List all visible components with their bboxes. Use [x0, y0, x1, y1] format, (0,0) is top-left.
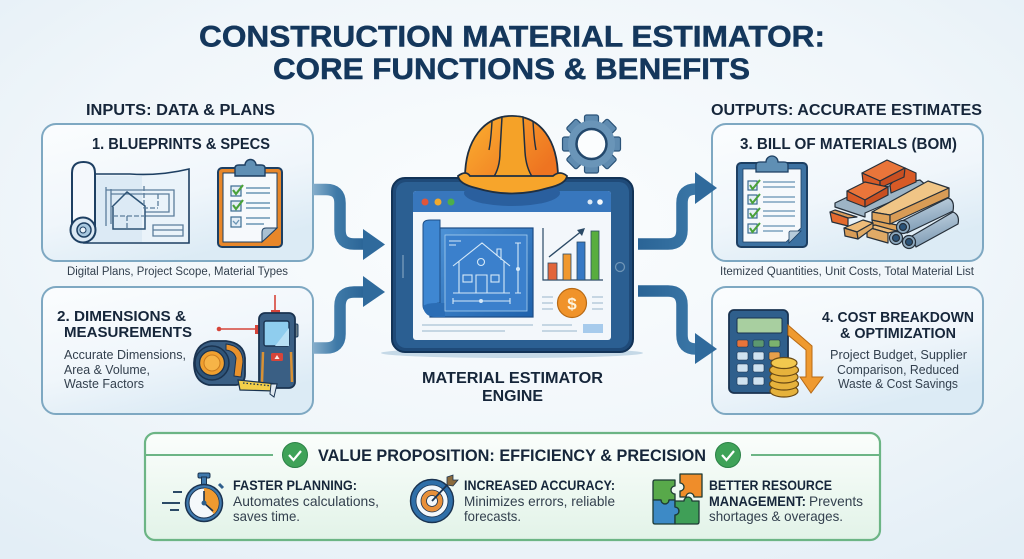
panel heading: dimensions: MEASUREMENTS: [64, 324, 192, 341]
title: CONSTRUCTION MATERIAL ESTIMATOR:: [199, 20, 825, 54]
center: material estimator engine: [381, 115, 643, 405]
heading: inputs: INPUTS: DATA & PLANS: [86, 102, 275, 119]
benefit: better resource management: MANAGEMENT:: [709, 494, 806, 509]
label: engine: ENGINE: [482, 388, 543, 405]
text block: cost detail: Waste & Cost Savings: [838, 376, 958, 391]
icon: checklist clipboard: [218, 160, 282, 247]
panel heading: cost breakdown: & OPTIMIZATION: [840, 325, 956, 342]
icon: hard hat: [458, 116, 567, 194]
icon: laser measure: [217, 295, 298, 388]
benefit: increased accuracy: [464, 478, 615, 524]
text block: dimensions detail: [64, 347, 186, 391]
panel: blueprints and specs: [42, 124, 313, 261]
arrow: blueprints to engine: [313, 190, 385, 260]
icon: blueprint house on screen: [423, 220, 533, 317]
text block: dimensions detail: Waste Factors: [64, 376, 144, 391]
text block: dimensions detail: Area & Volume,: [64, 362, 150, 377]
benefit: better resource management: shortages & overages.: [709, 508, 843, 524]
icon: coin stack: [770, 358, 798, 397]
heading: outputs: OUTPUTS: ACCURATE ESTIMATES: [711, 102, 982, 119]
text block: cost detail: Project Budget, Supplier: [830, 347, 968, 362]
value proposition heading: VALUE PROPOSITION: EFFICIENCY & PRECISION: [318, 446, 706, 465]
benefit: better resource management: Prevents: [809, 493, 863, 509]
text block: cost detail: Comparison, Reduced: [837, 362, 959, 377]
benefit: faster planning: Automates calculations,: [233, 493, 379, 509]
icon: materials clipboard: [737, 156, 807, 247]
benefit: increased accuracy: forecasts.: [464, 508, 521, 524]
title: [199, 20, 825, 86]
icon: building materials stack: [830, 160, 958, 248]
icon: blueprint: [70, 162, 189, 243]
label: engine: MATERIAL ESTIMATOR: [422, 370, 603, 387]
benefit: faster planning: FASTER PLANNING:: [233, 478, 357, 493]
arrow: engine to cost breakdown: [638, 291, 717, 364]
panel: dimensions and measurements: [42, 287, 313, 414]
panel: cost breakdown: [712, 287, 983, 414]
icon: calculator: [729, 310, 788, 393]
panel heading: dimensions: [57, 308, 192, 341]
shadow: [381, 348, 643, 358]
icon: check right: [716, 442, 740, 468]
panel heading: blueprints: 1. BLUEPRINTS & SPECS: [92, 136, 270, 153]
benefit: faster planning: saves time.: [233, 508, 300, 524]
panel: bill of materials: [712, 124, 983, 261]
arrow: dimensions to engine: [313, 276, 385, 348]
title: CORE FUNCTIONS & BENEFITS: [273, 53, 750, 86]
panel: value proposition: [145, 433, 880, 540]
panel heading: dimensions: 2. DIMENSIONS &: [57, 308, 186, 325]
tablet: [392, 178, 633, 352]
icon: cost reduction arrow: [788, 325, 823, 393]
icon: dollar coin: $: [567, 294, 577, 314]
icon: dollar coin: [542, 288, 603, 318]
icon: puzzle pieces: [653, 474, 702, 524]
icon: tape measure: [194, 341, 277, 397]
caption: inputs: Digital Plans, Project Scope, Material Types: [67, 266, 288, 278]
text block: cost detail: [830, 347, 968, 391]
panel heading: cost breakdown: 4. COST BREAKDOWN: [822, 309, 974, 326]
benefit: increased accuracy: INCREASED ACCURACY:: [464, 478, 615, 493]
label: engine: [422, 370, 603, 405]
icon: stopwatch: [162, 473, 223, 522]
benefit: better resource management: [709, 478, 863, 524]
caption: outputs: Itemized Quantities, Unit Costs, Total Material List: [720, 266, 975, 278]
text block: dimensions detail: Accurate Dimensions,: [64, 347, 186, 362]
panel heading: cost breakdown: [822, 309, 974, 342]
benefit: increased accuracy: Minimizes errors, reliable: [464, 493, 615, 509]
icon: target: [410, 475, 458, 522]
benefit: faster planning: [233, 478, 379, 524]
icon: check left: [282, 442, 308, 468]
panel heading: bill of materials: 3. BILL OF MATERIALS (BOM): [740, 136, 957, 153]
screen placeholder lines: [422, 324, 603, 333]
arrow: engine to bill of materials: [638, 172, 717, 244]
chart: growth bars: [543, 228, 603, 280]
benefit: better resource management: BETTER RESOURCE: [709, 478, 832, 493]
icon: gear: [562, 115, 620, 173]
